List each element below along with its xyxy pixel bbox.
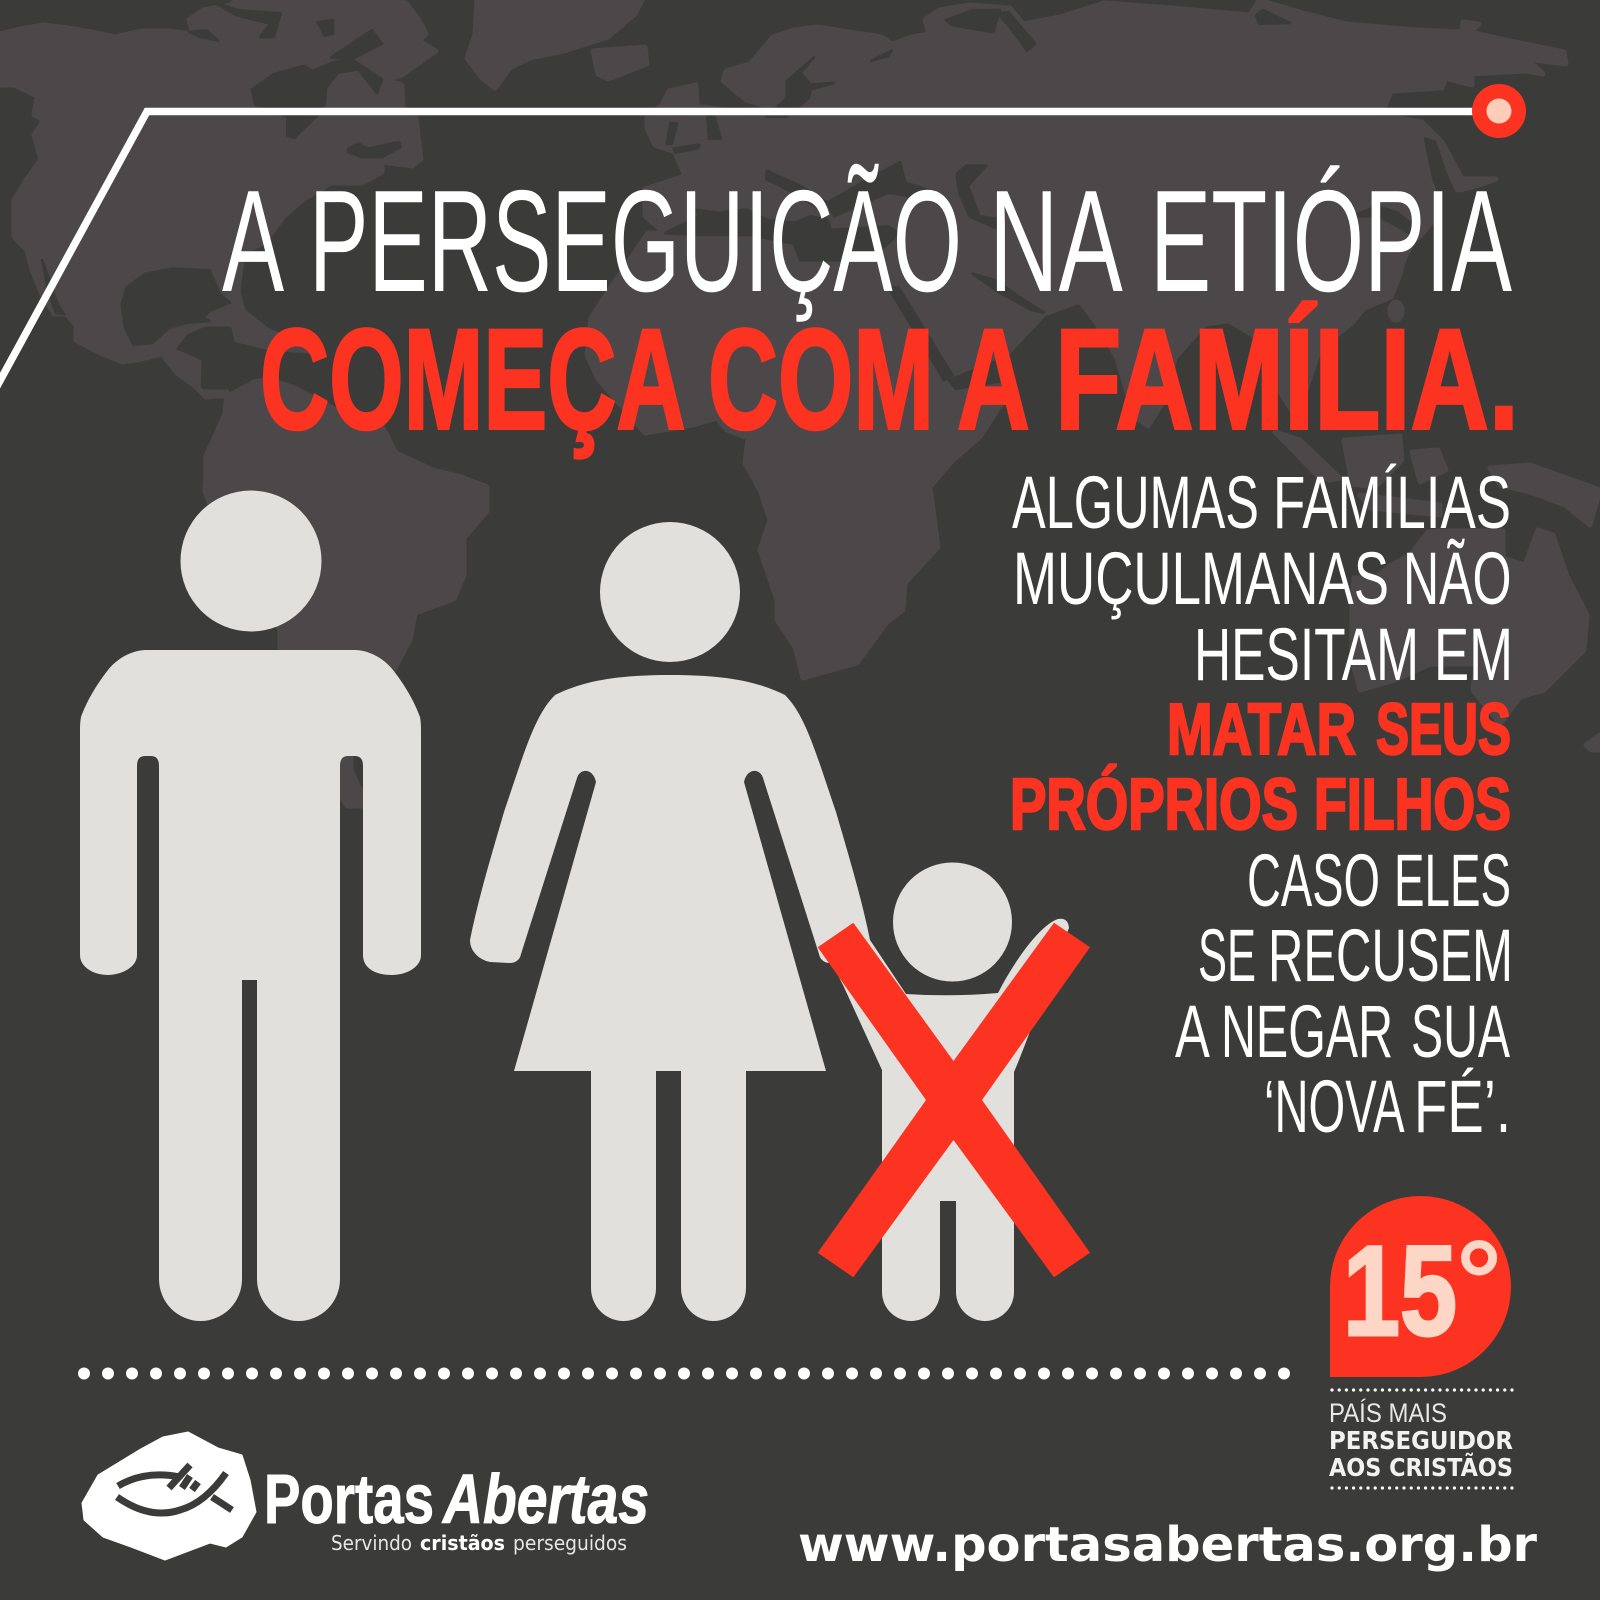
body text: NEGAR (1221, 990, 1393, 1073)
title line 1: NA (989, 160, 1123, 322)
title line 2: COMEÇA (260, 300, 683, 460)
title line 2: COM (708, 300, 934, 460)
body text: MUÇULMANAS (1013, 537, 1389, 620)
title line 2: A (957, 300, 1027, 460)
body text: MATAR (1167, 690, 1356, 770)
body text: ELES (1394, 839, 1511, 922)
body text: NÃO (1403, 537, 1512, 620)
badge caption (1329, 1390, 1519, 1488)
logo: Portas Abertas (82, 1432, 649, 1560)
europe, asia and africa water cut-outs (665, 10, 1044, 389)
icon: man (80, 490, 421, 1321)
body text: PRÓPRIOS (1010, 764, 1298, 845)
body text: A (1175, 990, 1210, 1073)
logo tagline: perseguidos (513, 1531, 627, 1555)
icon: woman (470, 522, 870, 1321)
body text: SEUS (1376, 690, 1511, 770)
logo tagline: cristãos (420, 1531, 505, 1555)
website url: www.portasabertas.org.br (798, 1517, 1537, 1573)
body text: SUA (1411, 990, 1510, 1073)
body text: FAMÍLIAS (1273, 461, 1511, 544)
title line 1: A (222, 160, 284, 322)
body text: CASO (1247, 839, 1380, 922)
badge caption: PAÍS MAIS (1329, 1398, 1447, 1428)
icon: child (825, 862, 1069, 1321)
body text: FILHOS (1314, 765, 1511, 845)
body text: ‘NOVA (1264, 1065, 1405, 1148)
frame line (0, 112, 1490, 388)
badge: 15th rank: 15 (1343, 1220, 1457, 1363)
world map background (0, 0, 1600, 806)
water cut-outs (42, 2, 401, 345)
title line 1: PERSEGUIÇÃO (309, 160, 962, 322)
badge: 15th rank: ° (1456, 1217, 1502, 1345)
body text: ALGUMAS (1012, 461, 1259, 544)
frame line end dot (1472, 84, 1526, 138)
body text: HESITAM (1194, 613, 1419, 696)
logo wordmark: Abertas (441, 1460, 649, 1538)
body text: FÉ’. (1414, 1065, 1511, 1148)
logo mark (82, 1432, 256, 1560)
dotted divider (84, 1368, 1288, 1380)
badge caption: PERSEGUIDOR (1329, 1426, 1513, 1455)
red X over child (818, 923, 1090, 1277)
body text: SE (1198, 914, 1256, 997)
badge: 15th rank (1330, 1196, 1511, 1377)
title (222, 160, 1519, 460)
badge caption: AOS CRISTÃOS (1329, 1453, 1513, 1482)
logo wordmark: Portas (264, 1460, 434, 1538)
body text (1010, 461, 1513, 1148)
body text: EM (1434, 613, 1513, 696)
logo tagline: Servindo (331, 1531, 412, 1555)
